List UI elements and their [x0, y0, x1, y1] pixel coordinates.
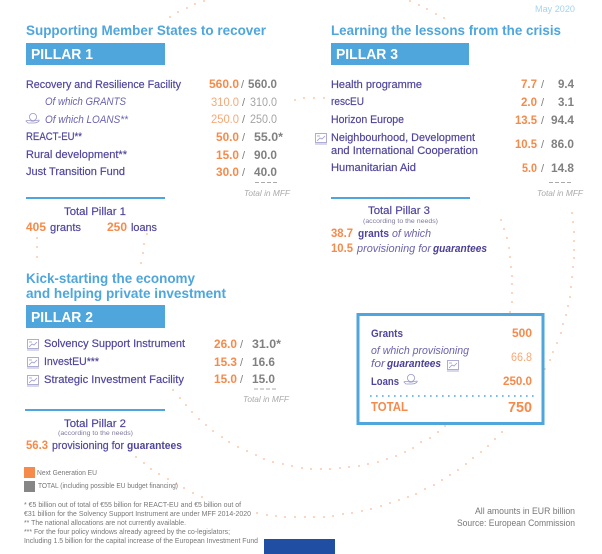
- total in MFF note: [243, 389, 290, 404]
- total pillar 1: grants: [50, 222, 82, 234]
- row: InvestEU: InvestEU***: [44, 356, 100, 368]
- row: Humanitarian Aid: [331, 161, 574, 175]
- row: Horizon Europe: [331, 113, 574, 127]
- total pillar 3: of which: [392, 228, 431, 240]
- row: Just Transition Fund: /: [242, 167, 246, 179]
- date: May 2020: [535, 4, 575, 15]
- row: Rural development: [26, 148, 277, 162]
- legend: total: TOTAL (including possible EU budget financing): [38, 481, 178, 490]
- panel: pillar 1: [26, 22, 291, 234]
- footnotes: €31 billion for the Solvency Support Instrument are under MFF 2014-2020: [24, 509, 251, 518]
- total pillar 1: 405: [26, 220, 46, 234]
- provisioning for guarantees row: guarantees: [386, 358, 441, 370]
- pillar 3 banner: [331, 43, 469, 65]
- heading: pillar 2: Kick-starting the economy: [26, 270, 195, 286]
- blue footer tab: [264, 539, 335, 554]
- row: Health programme: 9.4: [558, 77, 574, 91]
- total row: 750: [508, 399, 532, 416]
- pillar 2 banner: PILLAR 2: [31, 310, 93, 326]
- total pillar 3: grants: [358, 228, 389, 240]
- provisioning for guarantees row: [371, 345, 532, 371]
- row: Neighbourhood, Development and International Cooperation: [315, 132, 574, 157]
- total pillar 3: Total Pillar 3: [368, 205, 430, 217]
- provisioning for guarantees row: of which provisioning: [371, 345, 470, 357]
- legend: next generation EU: Next Generation EU: [37, 468, 97, 477]
- loans row: 250.0: [503, 374, 532, 388]
- row: Neighbourhood, Development and International Cooperation: /: [541, 139, 545, 151]
- total pillar 3: (according to the needs): [363, 218, 438, 225]
- row: rescEU: [331, 95, 574, 109]
- row: Solvency Support Instrument: [27, 337, 281, 351]
- row: of which loans: [26, 112, 277, 126]
- row: InvestEU: /: [240, 357, 244, 369]
- row: Health programme: /: [541, 79, 545, 91]
- panel: totals box: [358, 314, 543, 424]
- total in MFF note: Total in MFF: [537, 188, 584, 198]
- heading: pillar 2: [26, 270, 226, 301]
- row: Strategic Investment Facility: 15.0: [252, 372, 275, 386]
- row: REACT-EU: [26, 130, 283, 144]
- loans row: [371, 374, 532, 388]
- row: rescEU: rescEU: [331, 96, 364, 108]
- total pillar 3: 10.5: [331, 241, 353, 255]
- row: Health programme: [331, 77, 574, 91]
- row: REACT-EU: 50.0: [216, 130, 239, 144]
- row: Solvency Support Instrument: /: [240, 339, 244, 351]
- total in MFF note: [537, 182, 584, 198]
- row: of which grants: [45, 95, 277, 109]
- legend: [24, 467, 178, 492]
- loans row: Loans: [371, 376, 399, 388]
- total pillar 2: provisioning for: [52, 440, 124, 452]
- row: Strategic Investment Facility: /: [240, 374, 244, 386]
- row: Humanitarian Aid: 5.0: [522, 161, 537, 175]
- row: Solvency Support Instrument: Solvency Support Instrument: [44, 338, 185, 350]
- row: InvestEU: [27, 355, 275, 369]
- total pillar 1: [26, 206, 157, 234]
- footnotes: ** The national allocations are not currently available.: [24, 518, 186, 527]
- total pillar 1: 250: [107, 220, 127, 234]
- row: of which loans: /: [242, 114, 246, 126]
- row: Neighbourhood, Development and International Cooperation: and International Cooperation: [331, 145, 478, 157]
- pillar 1 banner: [26, 43, 165, 65]
- source note: All amounts in EUR billion: [475, 506, 575, 516]
- total pillar 3: guarantees: [432, 243, 487, 255]
- row: Health programme: Health programme: [331, 79, 422, 91]
- footnotes: [24, 500, 258, 545]
- heading: pillar 2: and helping private investment: [26, 285, 226, 301]
- row: of which grants: Of which GRANTS: [45, 96, 127, 108]
- grants row: [371, 326, 532, 340]
- row: REACT-EU: /: [242, 132, 246, 144]
- row: Just Transition Fund: 30.0: [216, 165, 239, 179]
- row: Neighbourhood, Development and International Cooperation: Neighbourhood, Development: [331, 132, 475, 144]
- row: of which grants: 310.0: [211, 95, 239, 109]
- row: Recovery and Resilience Facility: /: [241, 79, 245, 91]
- total pillar 3: 38.7: [331, 226, 353, 240]
- row: of which loans: Of which LOANS**: [45, 114, 129, 126]
- panel: pillar 3: [315, 22, 584, 255]
- total pillar 2: guarantees: [127, 440, 182, 452]
- row: Strategic Investment Facility: [27, 372, 275, 386]
- total pillar 2: Total Pillar 2: [64, 418, 126, 430]
- row: Recovery and Resilience Facility: 560.0: [248, 77, 277, 91]
- row: Humanitarian Aid: /: [541, 163, 545, 175]
- heading: pillar 1: Supporting Member States to recover: [26, 22, 267, 38]
- row: of which grants: /: [242, 97, 246, 109]
- row: Just Transition Fund: Just Transition Fund: [26, 166, 125, 178]
- panel: pillar 2: [25, 270, 290, 452]
- row: Solvency Support Instrument: 31.0*: [252, 337, 281, 351]
- total in MFF note: Total in MFF: [243, 394, 290, 404]
- row: Horizon Europe: Horizon Europe: [331, 114, 404, 126]
- footnotes: * €5 billion out of total of €55 billion for REACT-EU and €5 billion out of: [24, 500, 242, 509]
- legend: next generation EU: [24, 467, 97, 478]
- total pillar 2: 56.3: [26, 438, 48, 452]
- row: Rural development: Rural development**: [26, 149, 128, 161]
- grants row: Grants: [371, 328, 403, 340]
- row: REACT-EU: 55.0*: [254, 130, 283, 144]
- row: of which grants: 310.0: [250, 95, 277, 109]
- footnotes: *** For the four policy windows already agreed by the co-legislators;: [24, 527, 230, 536]
- total pillar 1: Total Pillar 1: [64, 206, 126, 218]
- row: of which loans: 250.0: [211, 112, 239, 126]
- row: Strategic Investment Facility: 15.0: [214, 372, 237, 386]
- total pillar 2: (according to the needs): [58, 430, 133, 437]
- pillar 2 banner: [26, 305, 165, 328]
- row: rescEU: /: [541, 97, 545, 109]
- total row: [371, 399, 532, 416]
- row: rescEU: 2.0: [521, 95, 537, 109]
- row: Just Transition Fund: 40.0: [254, 165, 277, 179]
- heading: pillar 3: Learning the lessons from the crisis: [331, 22, 561, 38]
- total pillar 2: [26, 418, 182, 452]
- row: Rural development: 90.0: [254, 148, 277, 162]
- row: Recovery and Resilience Facility: 560.0: [209, 77, 239, 91]
- total row: TOTAL: [371, 399, 408, 414]
- total in MFF note: Total in MFF: [244, 188, 291, 198]
- total pillar 3: provisioning for: [356, 243, 432, 255]
- row: InvestEU: 16.6: [252, 355, 275, 369]
- pillar 1 banner: PILLAR 1: [31, 47, 93, 63]
- row: Health programme: 7.7: [521, 77, 537, 91]
- row: of which loans: 250.0: [250, 112, 277, 126]
- row: Horizon Europe: /: [541, 115, 545, 127]
- row: Humanitarian Aid: Humanitarian Aid: [331, 162, 416, 174]
- row: Strategic Investment Facility: Strategic Investment Facility: [44, 374, 184, 386]
- grants row: 500: [512, 326, 532, 340]
- total pillar 3: [331, 205, 487, 255]
- row: Recovery and Resilience Facility: [26, 77, 277, 91]
- row: Recovery and Resilience Facility: Recovery and Resilience Facility: [26, 79, 181, 91]
- row: Solvency Support Instrument: 26.0: [214, 337, 237, 351]
- provisioning for guarantees row: for: [371, 358, 386, 370]
- provisioning for guarantees row: 66.8: [511, 350, 532, 364]
- pillar 3 banner: PILLAR 3: [336, 47, 398, 63]
- footnotes: Including 1.5 billion for the capital increase of the European Investment Fund: [24, 536, 258, 545]
- row: Rural development: 15.0: [216, 148, 239, 162]
- row: Horizon Europe: 94.4: [551, 113, 574, 127]
- total in MFF note: [244, 182, 291, 198]
- legend: total: [24, 481, 178, 492]
- total pillar 1: loans: [131, 222, 157, 234]
- source note: [457, 506, 575, 528]
- row: rescEU: 3.1: [558, 95, 574, 109]
- row: InvestEU: 15.3: [214, 355, 237, 369]
- row: Just Transition Fund: [26, 165, 277, 179]
- row: Horizon Europe: 13.5: [515, 113, 537, 127]
- row: Neighbourhood, Development and International Cooperation: 10.5: [515, 137, 537, 151]
- row: Neighbourhood, Development and International Cooperation: 86.0: [551, 137, 574, 151]
- source note: Source: European Commission: [457, 518, 575, 528]
- row: Humanitarian Aid: 14.8: [551, 161, 574, 175]
- row: Rural development: /: [242, 150, 246, 162]
- row: REACT-EU: REACT-EU**: [26, 131, 83, 143]
